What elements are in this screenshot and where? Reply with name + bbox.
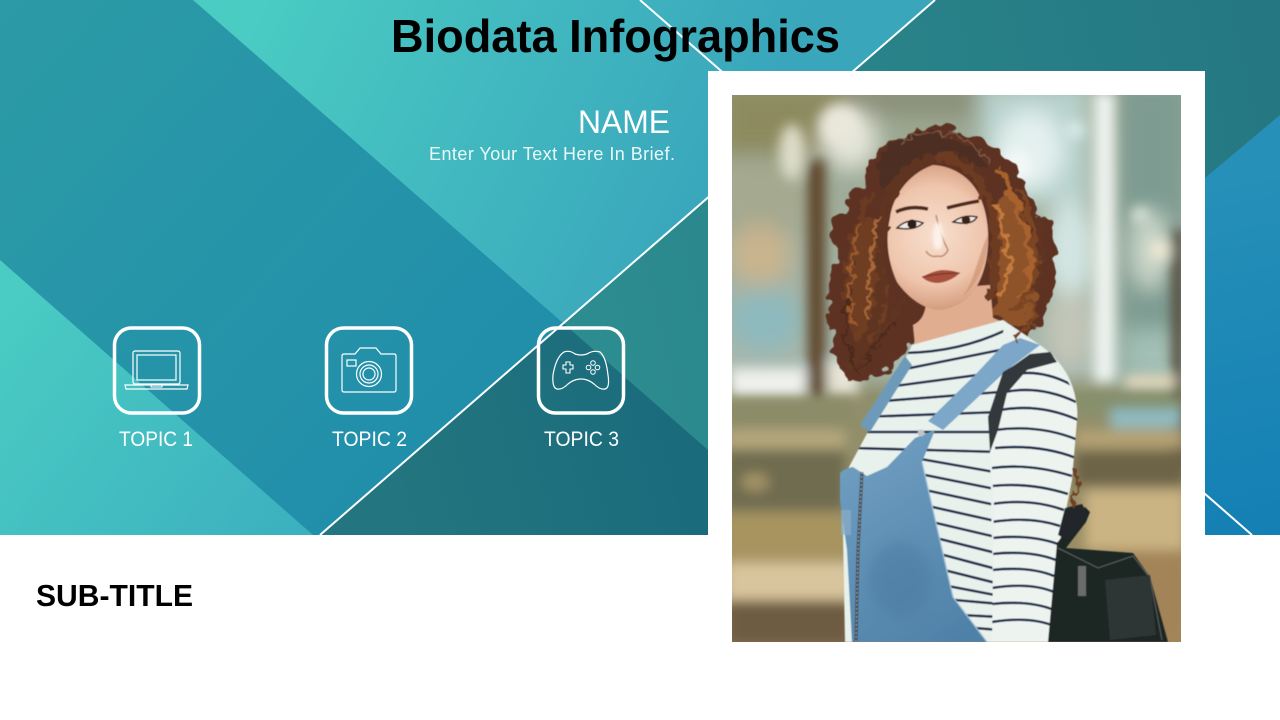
neck <box>913 285 1003 345</box>
label: topic 3: TOPIC 3 <box>544 428 619 451</box>
label: topic 2: TOPIC 2 <box>332 428 407 451</box>
person <box>828 127 1168 642</box>
torso stripes <box>852 330 1006 630</box>
front hair curls <box>844 133 1079 506</box>
topic 2 <box>326 328 412 451</box>
topic 1 <box>114 328 200 451</box>
title: Biodata Infographics <box>391 10 840 62</box>
eyebrows <box>896 208 928 212</box>
name heading: NAME <box>578 104 670 140</box>
nose <box>926 215 948 256</box>
photo: woman with curly hair in denim overalls <box>732 95 1181 642</box>
eyes <box>897 221 923 229</box>
name description: Enter Your Text Here In Brief. <box>429 144 675 164</box>
icon: game controller <box>538 328 624 413</box>
icon: laptop <box>114 328 200 413</box>
sub-title: SUB-TITLE <box>36 578 193 613</box>
back hair <box>828 127 1055 380</box>
bag strap <box>988 352 1057 452</box>
blurred scenery <box>720 85 1188 385</box>
ground bands <box>725 395 1185 646</box>
photo frame <box>708 71 1205 666</box>
arm stripes <box>992 373 1078 626</box>
backpack <box>1048 504 1168 642</box>
label: topic 1: TOPIC 1 <box>119 428 193 451</box>
face <box>888 165 988 310</box>
torso shirt <box>842 320 1077 642</box>
lips <box>922 270 960 283</box>
topic 3 <box>538 328 624 451</box>
denim overalls <box>840 338 1040 642</box>
icon: camera <box>326 328 412 413</box>
background: geometric banner <box>0 0 1280 535</box>
arm <box>990 358 1077 642</box>
